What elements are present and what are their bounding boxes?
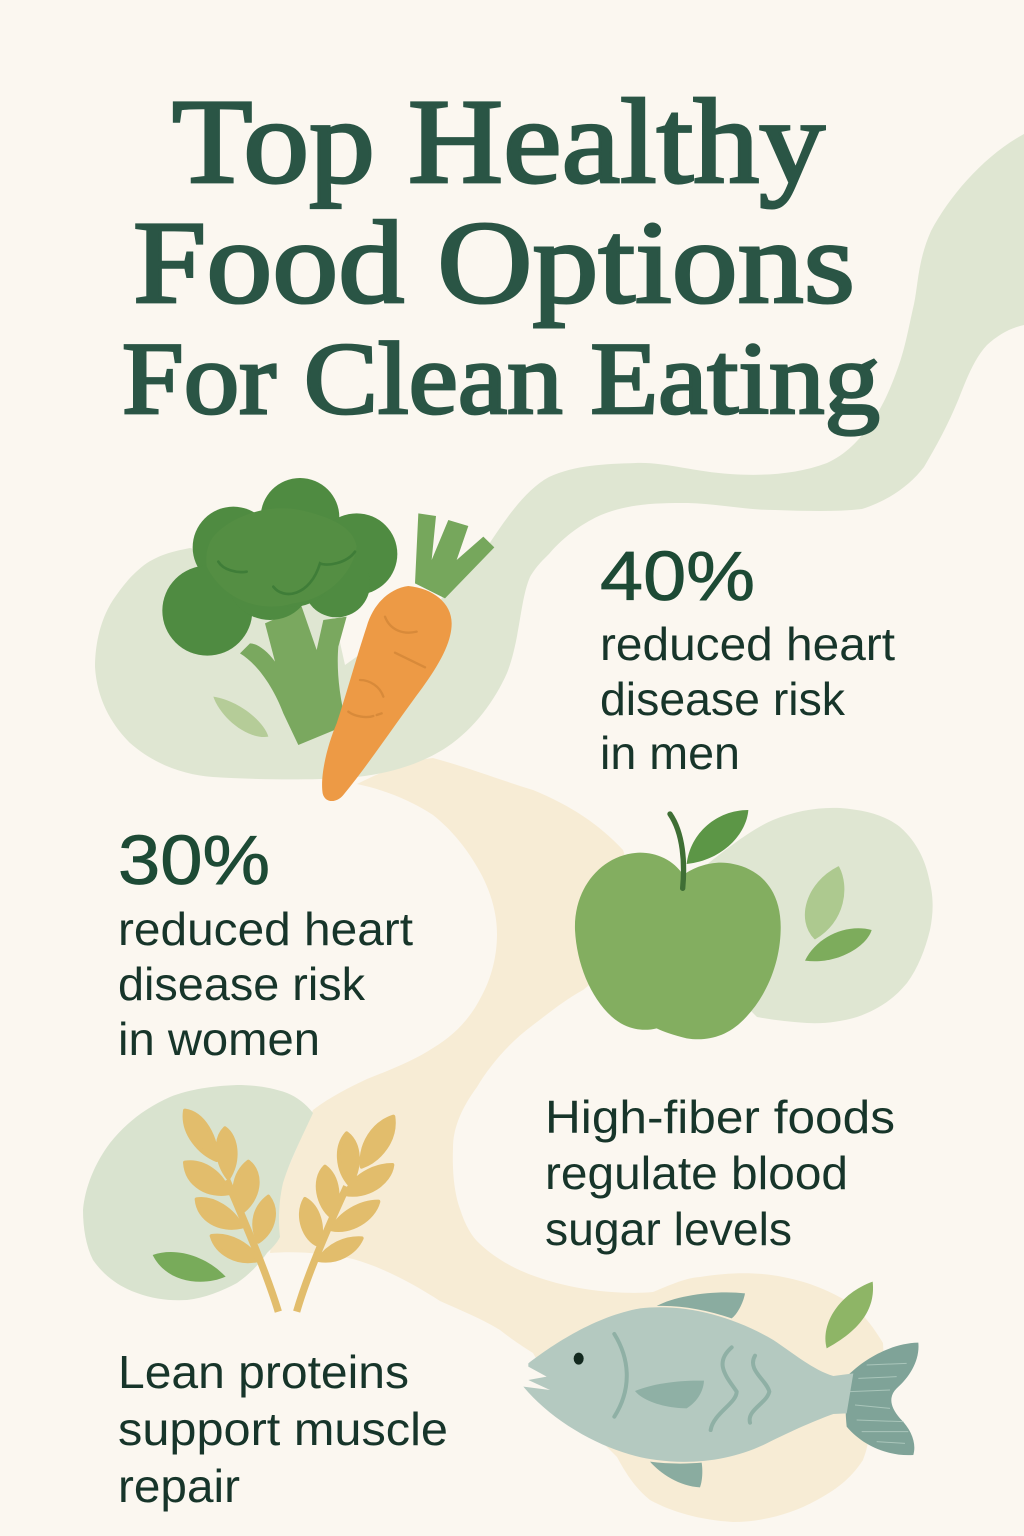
title: For Clean Eating (122, 322, 880, 436)
green flowing ribbon and vegetable backdrop (95, 134, 1024, 779)
stat: 40 percent men (600, 537, 895, 779)
stat: 40 percent men: in men (600, 727, 740, 779)
text: high-fiber foods: High-fiber foods (545, 1091, 895, 1143)
stat: 30 percent women: reduced heart (118, 903, 413, 955)
icon: wheat (153, 1111, 394, 1312)
icon: fish (523, 1282, 919, 1487)
icon: apple (575, 810, 872, 1039)
icon: carrot (322, 513, 494, 801)
title: Food Options (133, 197, 855, 328)
title (122, 75, 880, 436)
stat: 40 percent men: disease risk (600, 673, 846, 725)
text: high-fiber foods: regulate blood (545, 1147, 848, 1199)
text: high-fiber foods (545, 1091, 895, 1255)
text: lean proteins: support muscle (118, 1403, 448, 1455)
stat: 30 percent women: disease risk (118, 958, 366, 1010)
title: Top Healthy (172, 75, 826, 209)
stat: 30 percent women: 30% (118, 821, 270, 899)
stat: 40 percent men: reduced heart (600, 618, 895, 670)
cream flowing path and fish backdrop (270, 758, 885, 1522)
icon: broccoli (162, 478, 397, 745)
text: high-fiber foods: sugar levels (545, 1203, 792, 1255)
wheat backdrop blob (83, 1085, 313, 1300)
text: lean proteins: repair (118, 1460, 240, 1512)
text: lean proteins: Lean proteins (118, 1346, 409, 1398)
apple backdrop blob (700, 808, 933, 1023)
stat: 30 percent women: in women (118, 1013, 320, 1065)
stat: 40 percent men: 40% (600, 537, 755, 615)
stat: 30 percent women (118, 821, 413, 1065)
text: lean proteins (118, 1346, 448, 1512)
